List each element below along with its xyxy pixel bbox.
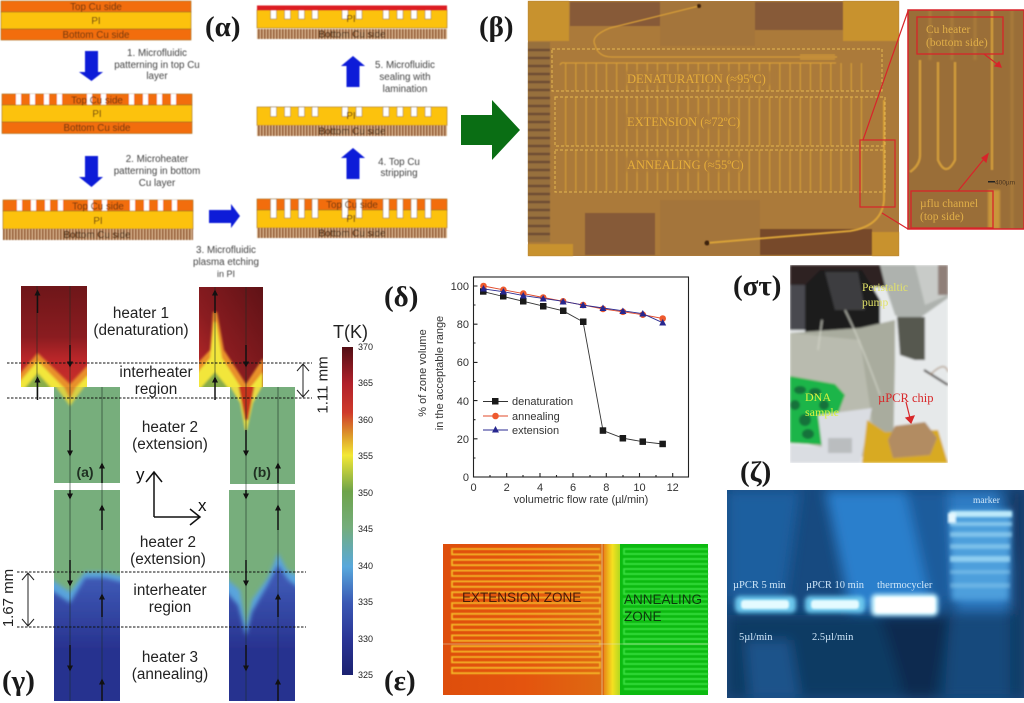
label: annealing zone: ANNEALING [624,592,702,607]
dimension 1.11 mm: 1.11 mm [314,356,332,414]
labels: heater regions: heater 1 [113,305,169,322]
labels: heater regions [93,305,208,683]
photo label: peristaltic pump: Peristaltic [862,282,908,294]
labels: heater regions: region [135,381,177,398]
stack 5: copper stripped [257,107,447,138]
text: step 1: patterning in top Cu [114,60,200,71]
text: step 5: lamination [383,84,427,95]
arrow: channel callout [958,154,988,191]
colorbar: 330 [358,634,373,644]
text: step 3: 3. Microfluidic [196,245,256,256]
label alpha: (α) [205,11,240,43]
crosshair lines [443,544,708,695]
heat map column b [199,287,295,701]
x axis labels: 6 [570,482,576,494]
arrow: step 1 [79,51,103,81]
text: step 3: in PI [217,269,235,279]
colorbar: 360 [358,415,373,425]
y axis labels: 40 [457,396,469,408]
x axis labels: 4 [537,482,543,494]
stack 2: patterned top copper: Bottom Cu side [64,123,131,134]
legend: extension [512,425,559,437]
stack 6: sealed with lamination [257,6,447,40]
callout: Cu heater [917,17,1003,54]
text: step 4: stripping [380,168,418,179]
stack 5: copper stripped: PI [346,111,356,122]
x axis labels: 10 [633,482,646,494]
stack 3: patterned heater: Top Cu side [72,202,124,212]
panel epsilon: thermal image [443,544,708,695]
gel background [727,490,1024,698]
extension meander [452,549,600,673]
gel labels: marker [973,496,1001,506]
text: step 4: 4. Top Cu [378,157,420,168]
stack 1: initial laminate: Top Cu side [70,2,122,13]
callout: Cu heater: (bottom side) [926,37,988,49]
legend: denaturation [512,396,573,408]
labels: heater regions: interheater [119,364,193,381]
gel labels: µPCR 10 min [806,580,865,591]
stack 3: patterned heater: Bottom Cu side [64,230,131,241]
photo label: peristaltic pump: pump [862,297,888,309]
zone labels: EXTENSION (≈72ºC) [627,115,740,129]
text: step 2: Cu layer [139,178,176,189]
arrow: chip [906,402,914,423]
annealing meander [624,549,708,689]
panel alpha: fabrication process [1,1,447,279]
arrow: step 4 [341,148,365,179]
dashed zone outlines [552,49,885,192]
heat map column a [21,286,120,701]
callout: Cu heater: Cu heater [926,24,971,36]
y axis title line 2: in the acceptable range [434,316,446,430]
xy axes [136,465,207,525]
colorbar: 370 [358,342,373,352]
dimension 1.67 mm: 1.67 mm [0,569,17,627]
gel labels: 2.5µl/min [812,632,854,643]
photo label: DNA sample: sample [805,405,839,419]
stack 2: patterned top copper [2,94,192,134]
labels: heater regions: region [149,599,191,616]
panel beta: chip photograph [528,1,1024,256]
colorbar: 325 [358,670,373,680]
photo label: peristaltic pump [862,282,908,309]
label (b): (b) [253,464,271,480]
x axis labels: 12 [667,482,679,494]
colorbar title: T(K) [333,322,368,342]
x axis title: volumetric flow rate (µl/min) [514,494,648,506]
labels: heater regions: interheater [133,582,207,599]
stack 2: patterned top copper: Top Cu side [71,96,123,106]
arrow: heater callout [984,54,1001,67]
inset: close-up of channel and heater [908,10,1024,229]
series: annealing [480,283,666,322]
labels: heater regions: heater 3 [142,649,198,666]
dotted boundaries [7,363,312,627]
text: step 2: patterning in bottom [114,166,200,177]
label zeta: (ζ) [740,456,771,488]
flow arrows [38,291,278,701]
labels: heater regions: heater 2 [142,419,198,436]
colorbar: 355 [358,451,373,461]
stack 2: patterned top copper: PI [92,109,102,120]
x axis labels [470,482,679,494]
labels: heater regions: heater 2 [140,534,196,551]
xy axes: x [198,496,207,515]
colorbar: 340 [358,561,373,571]
xy axes: y [136,465,145,484]
callout: microfluidic channel [911,191,993,228]
callout: microfluidic channel: µflu channel [920,198,978,210]
streamlines [37,286,278,701]
zone labels: DENATURATION (≈95ºC) [627,72,766,86]
stack 4: plasma etched channels [257,199,447,240]
plot frame and ticks [474,277,688,477]
y axis labels [451,281,469,484]
x axis labels: 0 [470,482,477,494]
dimension 1.67 mm [0,569,34,627]
label: annealing zone [624,592,702,624]
arrow: green process arrow [461,100,520,160]
text: step 1: layer [146,71,168,82]
panel zeta: gel electrophoresis [727,490,1024,698]
colorbar: 365 [358,378,373,388]
colorbar: 345 [358,524,373,534]
labels: heater regions: (extension) [132,436,208,453]
zone labels: ANNEALING (≈55ºC) [627,158,744,172]
chip background [528,1,899,256]
label gamma: (γ) [2,665,35,697]
stack 1: initial laminate: PI [91,16,101,27]
colorbar: 350 [358,488,373,498]
y axis labels: 60 [457,357,469,369]
marker ladder [948,510,1012,600]
label (a): (a) [76,464,94,480]
y axis labels: 20 [457,434,469,446]
text: step 1: 1. Microfluidic [127,48,187,59]
text: step 5: sealing with [379,72,431,83]
photo scene [790,265,948,463]
y axis title: % of zone volume [417,329,429,417]
y axis labels: 100 [451,281,469,293]
label beta: (β) [479,11,514,43]
transition band [604,544,621,695]
label delta: (δ) [384,281,418,313]
legend [483,396,573,437]
legend: annealing [512,411,560,423]
x axis labels: 2 [504,482,510,494]
orange extension zone [443,544,605,695]
stack 3: patterned heater [3,200,193,241]
arrow: step 3 [209,204,240,228]
text: step 2: 2. Microheater [126,154,189,165]
text: step 3: plasma etching [193,257,259,268]
stack 4: plasma etched channels: Bottom Cu side [319,228,386,240]
stack 1: initial laminate: Bottom Cu side [63,30,130,41]
stack 4: plasma etched channels: Top Cu side [326,200,378,211]
stack 6: sealed with lamination: PI [346,14,356,25]
photo label: DNA sample: DNA [805,390,831,404]
photo label: chip: µPCR chip [878,391,933,405]
scale bar: 400µm [995,180,1015,186]
dimension 1.11 mm [297,356,332,414]
labels: heater regions: (denaturation) [93,322,189,339]
stack 4: plasma etched channels: PI [346,214,356,225]
stack 5: copper stripped: Bottom Cu side [319,126,386,138]
labels: heater regions: (extension) [130,551,206,568]
panel sigma-tau: experimental photograph [790,265,948,463]
green annealing zone [620,544,708,695]
text: step 5: 5. Microfluidic [375,60,435,71]
gel labels [733,496,1001,643]
callout: microfluidic channel: (top side) [920,211,964,223]
zoom box and leader lines [860,11,908,229]
label: annealing zone: ZONE [624,609,662,624]
gel labels: 5µl/min [739,632,773,643]
panel gamma: temperature simulation [0,286,373,703]
x axis labels: 8 [603,482,609,494]
label: extension zone: EXTENSION ZONE [462,590,581,605]
series: extension [480,285,666,326]
arrow: step 5 [341,56,365,87]
label epsilon: (ε) [384,665,416,697]
gel labels: thermocycler [877,580,933,591]
colorbar: 335 [358,597,373,607]
y axis labels: 80 [457,319,469,331]
panel delta: flow rate chart [417,277,688,506]
photo label: DNA sample [805,390,839,419]
series: denaturation [480,288,666,447]
labels: heater regions: (annealing) [132,666,208,683]
arrow: step 2 [79,156,103,187]
stack 1: initial laminate [1,1,191,41]
stack 3: patterned heater: PI [93,216,103,227]
colorbar [342,342,373,680]
microchannel serpentine [559,4,884,246]
label sigma tau: (στ) [733,270,781,302]
gel labels: µPCR 5 min [733,580,786,591]
chip pads and dark regions [528,1,899,256]
gel bands [735,594,938,616]
zone labels [625,71,775,172]
stack 6: sealed with lamination: Bottom Cu side [319,30,386,40]
y axis labels: 0 [463,472,469,484]
